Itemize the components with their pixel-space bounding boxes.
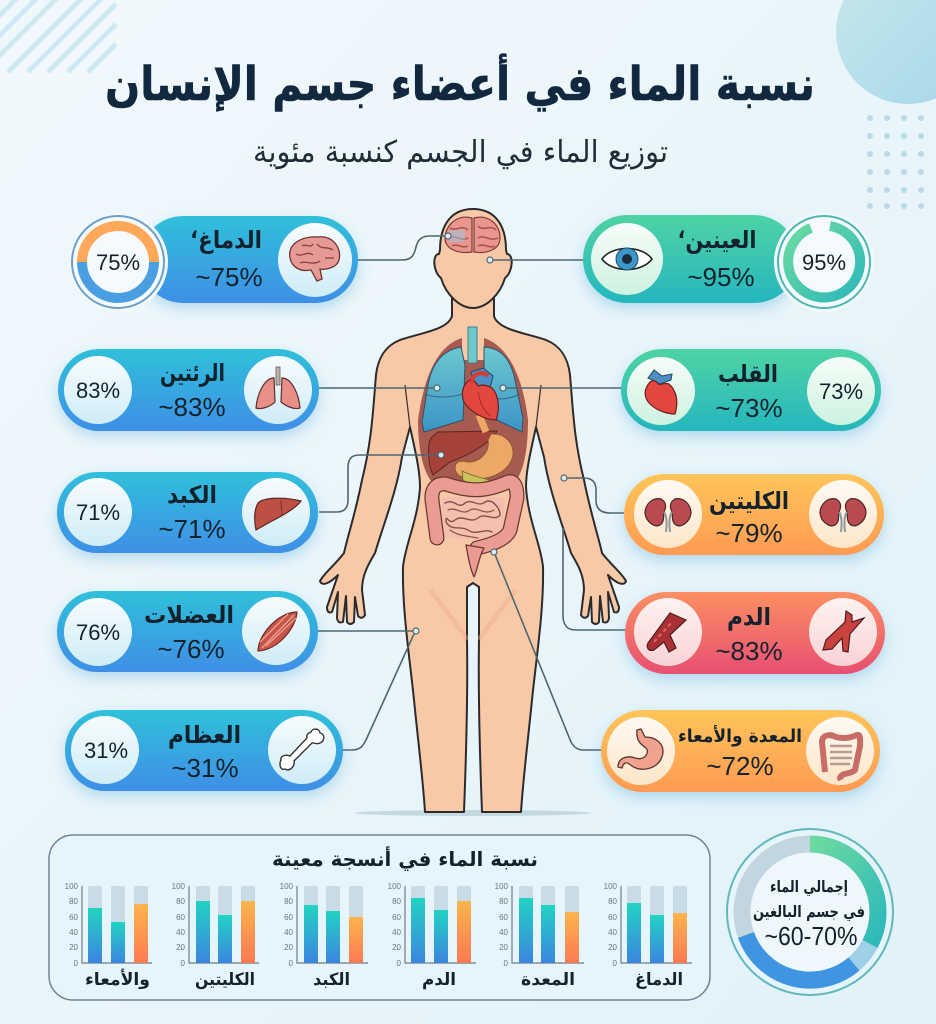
- decoration: corner stripes: [0, 0, 116, 72]
- organ: chest and abdomen cavity: [418, 338, 528, 482]
- icon: eye: [591, 223, 663, 295]
- chart: stomach: 40: [499, 928, 509, 937]
- chart: blood: الدم: [422, 970, 456, 990]
- label: liver: الكبد: [167, 481, 217, 509]
- chart: intestines: 80: [69, 897, 79, 906]
- chart: intestines: [65, 882, 152, 990]
- chart: stomach: 20: [499, 943, 509, 952]
- chart: brain: [604, 882, 692, 990]
- chart: stomach: 100: [495, 882, 509, 891]
- panel: brain: [68, 212, 358, 312]
- chart: kidneys: 100: [172, 882, 186, 891]
- panel: stomach and intestines: [601, 710, 880, 792]
- icon: intestines: [806, 717, 874, 785]
- badge: heart: [807, 357, 875, 425]
- badge: muscles: 76%: [76, 620, 120, 645]
- label: heart: القلب: [718, 360, 778, 388]
- panel: liver: [57, 472, 318, 553]
- chart: stomach: 80: [499, 897, 509, 906]
- value: heart: ~73%: [715, 393, 783, 423]
- chart: blood: 60: [392, 913, 402, 922]
- badge: bones: 31%: [84, 738, 128, 763]
- chart: blood: 100: [388, 882, 402, 891]
- chart: liver: 80: [284, 897, 294, 906]
- badge: lungs: 83%: [76, 378, 120, 403]
- chart: kidneys: 40: [176, 928, 186, 937]
- organ: large intestine: [432, 482, 517, 577]
- value: muscles: ~76%: [157, 634, 225, 664]
- title: نسبة الماء في أعضاء جسم الإنسان: [105, 53, 815, 112]
- heading: tissue charts: نسبة الماء في أنسجة معينة: [272, 845, 538, 872]
- chart: liver: [280, 882, 368, 990]
- organ: stomach: [455, 434, 513, 479]
- chart: liver: 100: [280, 882, 294, 891]
- value: stomach and intestines: ~72%: [706, 751, 774, 781]
- chart: liver: 20: [284, 943, 294, 952]
- chart: kidneys: [172, 882, 259, 990]
- value: blood: ~83%: [715, 636, 783, 666]
- chart: liver: 0: [289, 959, 294, 968]
- badge: bones: [71, 716, 139, 784]
- badge: muscles: [64, 598, 132, 666]
- donut text: title: إجمالي الماء: [770, 877, 848, 897]
- chart: brain: 80: [608, 897, 618, 906]
- chart: intestines: 100: [65, 882, 79, 891]
- organ: liver: [429, 431, 497, 475]
- ring: brain 75%: 75%: [96, 250, 140, 275]
- label: brain: الدماغ‘: [190, 226, 262, 254]
- chart: intestines: 20: [69, 943, 79, 952]
- chart: brain: الدماغ: [635, 970, 683, 990]
- chart: liver: 60: [284, 913, 294, 922]
- chart: brain: 40: [608, 928, 618, 937]
- icon: liver: [242, 478, 310, 546]
- icon: heart: [627, 357, 695, 425]
- chart: kidneys: 0: [181, 959, 186, 968]
- value: liver: ~71%: [158, 514, 226, 544]
- decoration: corner circle: [836, 0, 936, 104]
- label: eyes: العينين‘: [678, 226, 756, 254]
- chart: blood: 40: [392, 928, 402, 937]
- badge: heart: 73%: [819, 379, 863, 404]
- icon: muscle: [242, 597, 310, 665]
- ring: eyes 95%: [778, 216, 870, 308]
- organ: small intestine: [442, 497, 504, 539]
- chart: blood: 20: [392, 943, 402, 952]
- panel: lungs: [58, 349, 319, 431]
- icon: blood vessel left: [634, 598, 702, 666]
- organ: lungs: [422, 347, 523, 432]
- organ: brain: [445, 217, 500, 252]
- label: blood: الدم: [727, 603, 771, 631]
- value: bones: ~31%: [171, 753, 239, 783]
- chart: brain: 60: [608, 913, 618, 922]
- chart: kidneys: 60: [176, 913, 186, 922]
- body figure: [320, 209, 626, 816]
- chart: intestines: 0: [74, 959, 79, 968]
- chart: brain: 0: [613, 959, 618, 968]
- value: eyes: ~95%: [687, 262, 755, 292]
- label: muscles: العضلات: [144, 601, 234, 629]
- chart: kidneys: الكليتين: [195, 970, 255, 990]
- badge: liver: 71%: [76, 500, 120, 525]
- panel: bones: [65, 710, 343, 791]
- chart: blood: 80: [392, 897, 402, 906]
- chart: blood: [388, 882, 476, 990]
- icon: brain: [278, 223, 352, 297]
- chart: liver: الكبد: [313, 970, 350, 990]
- organ: heart: [462, 368, 498, 420]
- chart: stomach: المعدة: [521, 970, 575, 990]
- chart: stomach: 0: [504, 959, 509, 968]
- panel: heart: [621, 349, 881, 431]
- label: kidneys: الكليتين: [709, 487, 789, 515]
- panel: eyes: [583, 212, 874, 312]
- organ: trachea: [468, 327, 477, 363]
- panel: blood: [625, 592, 885, 674]
- subtitle: توزيع الماء في الجسم كنسبة مئوية: [253, 135, 668, 170]
- label: stomach and intestines: المعدة والأمعاء: [678, 725, 802, 747]
- icon: stomach: [607, 717, 675, 785]
- chart: intestines: والأمعاء: [85, 969, 150, 990]
- chart: kidneys: 80: [176, 897, 186, 906]
- label: lungs: الرئتين: [160, 359, 225, 387]
- chart: brain: 20: [608, 943, 618, 952]
- value: lungs: ~83%: [158, 392, 226, 422]
- panel: muscles: [57, 591, 318, 672]
- chart: intestines: 60: [69, 913, 79, 922]
- donut text: subtitle: في جسم البالغين: [753, 902, 865, 922]
- chart: intestines: 40: [69, 928, 79, 937]
- chart: liver: 40: [284, 928, 294, 937]
- value: brain: ~75%: [195, 262, 263, 292]
- value: kidneys: ~79%: [715, 518, 783, 548]
- leader lines: [318, 233, 625, 750]
- icon: bone: [268, 716, 336, 784]
- icon: kidneys right: [809, 480, 877, 548]
- ring: brain 75%: [72, 216, 164, 308]
- donut text: value: ~60-70%: [764, 921, 858, 951]
- icon: blood vessel right: [809, 598, 877, 666]
- label: bones: العظام: [168, 721, 241, 749]
- badge: liver: [64, 478, 132, 546]
- icon: lungs: [244, 356, 312, 424]
- chart: stomach: 60: [499, 913, 509, 922]
- badge: lungs: [64, 356, 132, 424]
- panel: tissue charts: [49, 835, 710, 1000]
- organ: esophagus: [479, 415, 486, 432]
- chart: blood: 0: [397, 959, 402, 968]
- chart: kidneys: 20: [176, 943, 186, 952]
- decoration: dot grid: [867, 115, 924, 209]
- icon: kidneys left: [634, 480, 702, 548]
- chart: brain: 100: [604, 882, 618, 891]
- ring: eyes 95%: 95%: [802, 250, 846, 275]
- chart: stomach: [495, 882, 584, 990]
- organ: pancreas: [462, 471, 490, 483]
- donut: adult body total: [727, 829, 893, 995]
- panel: kidneys: [624, 474, 884, 555]
